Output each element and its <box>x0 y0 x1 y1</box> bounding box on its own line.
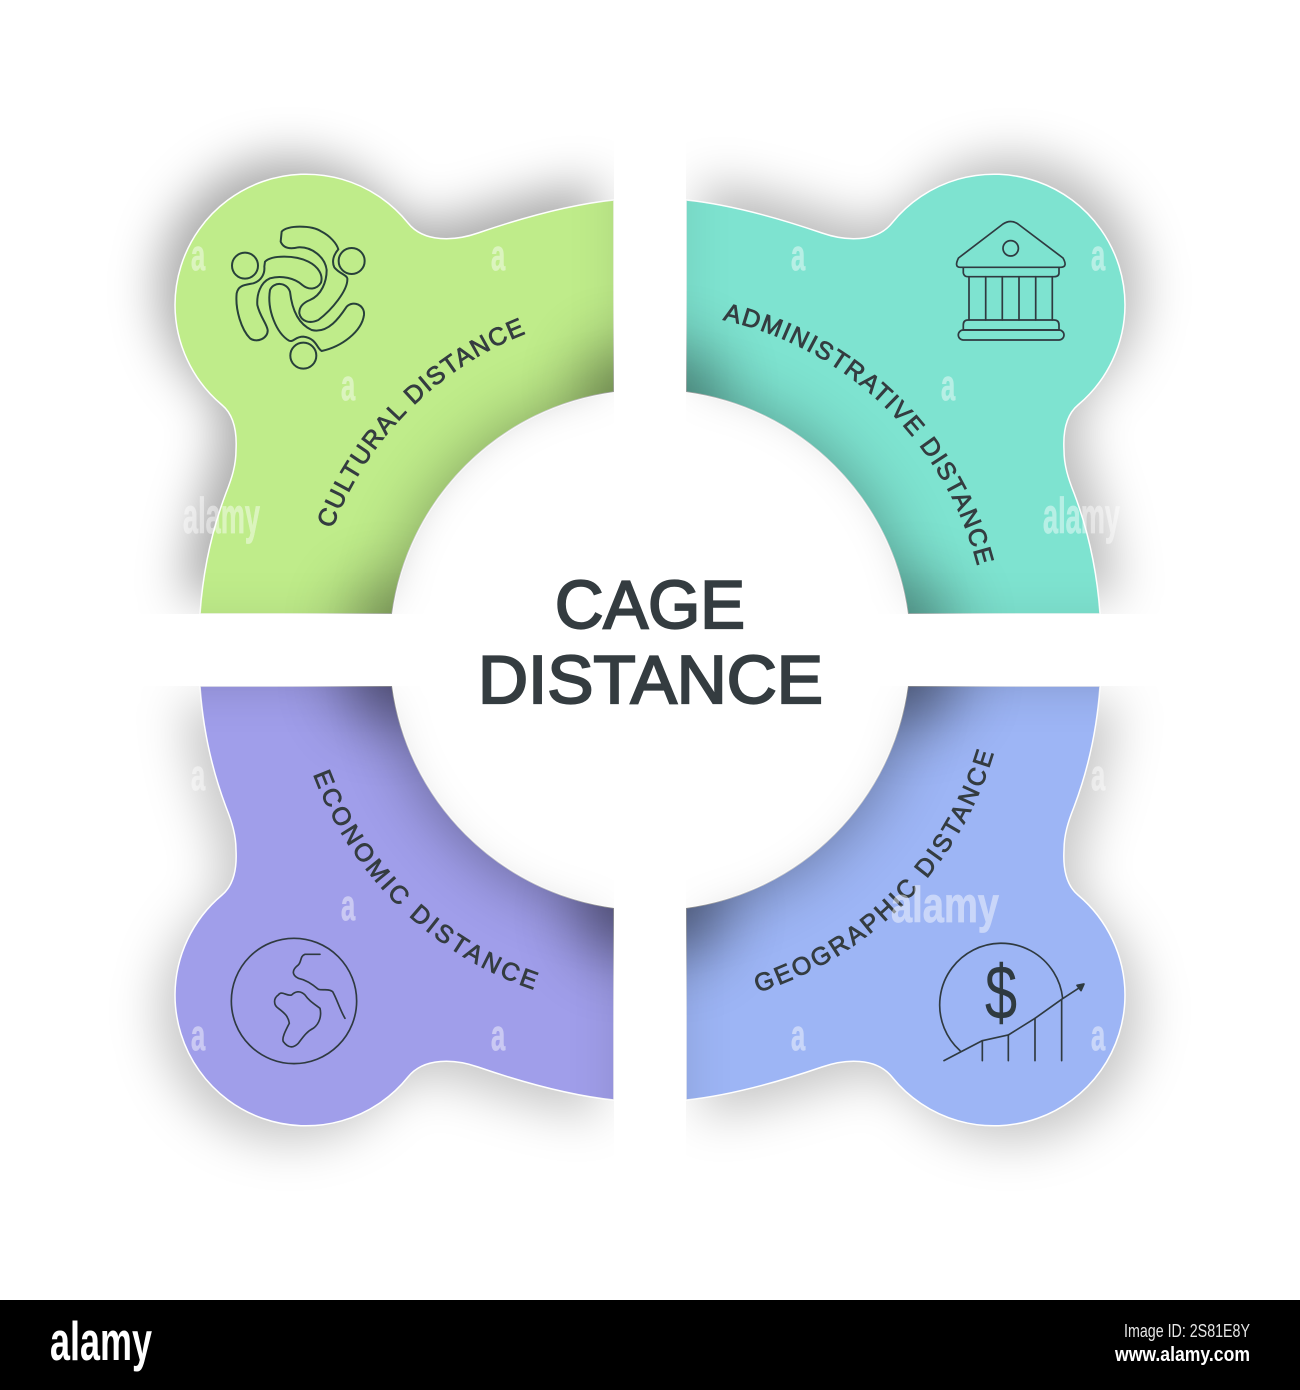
panel: cultural distance <box>174 174 614 614</box>
stock watermarks: a <box>341 360 356 410</box>
label: economic distance: ECONOMIC DISTANCE <box>313 769 539 990</box>
icon: government building <box>957 222 1065 340</box>
panel: geographic distance <box>686 686 1126 1126</box>
footer logo: alamy <box>50 1310 152 1372</box>
stock watermarks: a <box>191 230 206 280</box>
outer cast shadows of the four panels <box>159 158 1141 1142</box>
center title: DISTANCE <box>478 642 823 718</box>
panel: economic distance <box>174 686 614 1126</box>
label: geographic distance: GEOGRAPHIC DISTANCE <box>755 748 994 991</box>
footer bar <box>0 1300 1300 1390</box>
stock watermarks: a <box>191 1010 206 1060</box>
stock watermarks: alamy <box>183 488 260 544</box>
inner shading <box>200 200 614 614</box>
icon: people circle <box>232 227 365 369</box>
icon: dollar growth chart: $ <box>985 950 1017 1036</box>
icon: globe <box>231 938 357 1064</box>
icon: dollar growth chart <box>940 943 1084 1061</box>
label: cultural distance: CULTURAL DISTANCE <box>318 318 526 526</box>
inner shading <box>200 686 614 1100</box>
inner shading <box>686 686 1100 1100</box>
stock watermarks: a <box>1091 750 1106 800</box>
stock watermarks: a <box>1091 1010 1106 1060</box>
footer url: www.alamy.com <box>1114 1344 1250 1366</box>
stock watermarks: a <box>191 750 206 800</box>
stock watermarks: a <box>791 230 806 280</box>
label: administrative distance: ADMINISTRATIVE DISTANCE <box>722 304 994 566</box>
panel: administrative distance <box>686 174 1126 614</box>
stock watermarks: a <box>491 1010 506 1060</box>
stock watermarks: a <box>941 360 956 410</box>
stock watermarks: a <box>791 1010 806 1060</box>
center title <box>478 567 823 718</box>
stock watermarks: alamy <box>891 877 999 933</box>
footer image id: Image ID: 2S81E8Y <box>1124 1321 1250 1341</box>
stock watermarks: alamy <box>1043 488 1120 544</box>
inner shading <box>686 200 1100 614</box>
center title: CAGE <box>555 567 745 643</box>
stock watermarks: a <box>491 230 506 280</box>
stock watermarks: a <box>341 880 356 930</box>
stock watermarks <box>183 230 1120 1060</box>
stock watermarks: a <box>1091 230 1106 280</box>
